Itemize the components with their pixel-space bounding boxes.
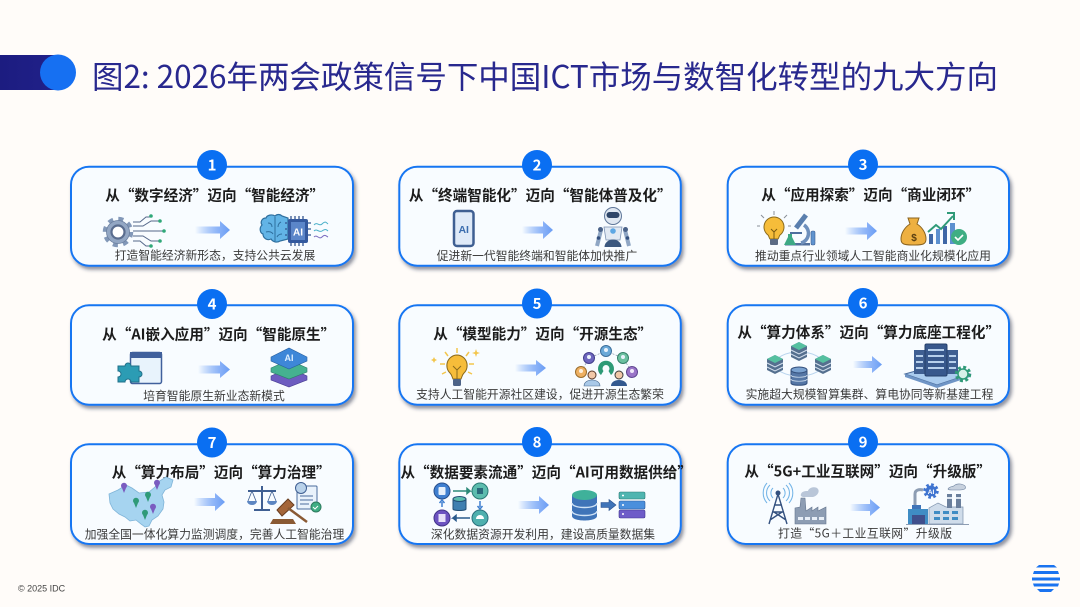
badge 2 bbox=[522, 150, 552, 180]
panel 9 bbox=[728, 427, 1009, 544]
panel 1 bbox=[71, 150, 353, 266]
heading 9: 从“5G+工业互联网”迈向“升级版” bbox=[744, 460, 991, 481]
badge 2: 2 bbox=[533, 154, 542, 176]
panel 7 bbox=[71, 428, 353, 544]
description 9: 打造“5G＋工业互联网”升级版 bbox=[778, 524, 952, 542]
copyright: © 2025 IDC bbox=[18, 584, 66, 594]
arrow bbox=[853, 356, 882, 373]
description 7: 加强全国一体化算力监测调度，完善人工智能治理 bbox=[85, 526, 344, 542]
icon: brain with AI chip bbox=[260, 214, 328, 246]
badge 9: 9 bbox=[859, 432, 868, 452]
header accent bar bbox=[0, 54, 76, 90]
badge 7: 7 bbox=[208, 432, 217, 453]
badge 8 bbox=[522, 427, 552, 457]
heading 7: 从“算力布局”迈向“算力治理” bbox=[112, 461, 331, 482]
description 5: 支持人工智能开源社区建设，促进开源生态繁荣 bbox=[416, 386, 664, 402]
badge 6: 6 bbox=[859, 292, 868, 314]
icon: money and growth chart: $ bbox=[911, 233, 917, 244]
icon: database to records bbox=[572, 490, 645, 520]
title: 图2: 2026年两会政策信号下中国ICT市场与数智化转型的九大方向 bbox=[92, 52, 998, 98]
icon: bright bulb bbox=[431, 348, 480, 386]
heading 1: 从“数字经济”迈向“智能经济” bbox=[105, 184, 324, 205]
panel 4 bbox=[71, 289, 353, 405]
badge 7 bbox=[197, 428, 227, 458]
icon: brain with AI chip: AI bbox=[293, 228, 303, 238]
icon: bulb and microscope bbox=[757, 211, 815, 246]
heading 3: 从“应用探索”迈向“商业闭环” bbox=[761, 184, 980, 205]
icon: smart factory: AI bbox=[928, 489, 934, 496]
icon: distributed servers bbox=[767, 342, 831, 385]
icon: scales, gavel and document bbox=[247, 482, 321, 524]
icon: money and growth chart bbox=[901, 213, 967, 245]
badge 5 bbox=[522, 288, 552, 318]
icon: signal tower and factory bbox=[763, 483, 826, 524]
badge 9 bbox=[848, 427, 878, 457]
arrow bbox=[850, 499, 880, 516]
arrow bbox=[198, 361, 230, 378]
icon: server platform bbox=[905, 344, 970, 388]
icon: smart factory bbox=[906, 484, 969, 525]
icon: AI phone: AI bbox=[458, 224, 469, 236]
arrow bbox=[522, 221, 553, 239]
description 3: 推动重点行业领域人工智能商业化规模化应用 bbox=[755, 247, 991, 264]
heading 6: 从“算力体系”迈向“算力底座工程化” bbox=[737, 321, 1000, 342]
badge 1 bbox=[197, 150, 227, 180]
arrow bbox=[195, 221, 230, 239]
icon: AI layer stack bbox=[271, 348, 307, 387]
heading 5: 从“模型能力”迈向“开源生态” bbox=[433, 323, 652, 344]
badge 1: 1 bbox=[208, 154, 216, 176]
panel 2 bbox=[399, 150, 681, 266]
logo bbox=[1032, 565, 1060, 592]
icon: AI phone bbox=[454, 211, 474, 246]
icon: puzzle and window bbox=[118, 352, 162, 384]
description 1: 打造智能经济新形态，支持公共云发展 bbox=[115, 246, 315, 264]
badge 3 bbox=[848, 150, 878, 180]
badge 8: 8 bbox=[533, 432, 542, 452]
icon: data flow cycle bbox=[434, 483, 488, 526]
panel 3 bbox=[728, 150, 1009, 266]
arrow bbox=[515, 360, 546, 376]
icon: China map with pins bbox=[109, 477, 173, 527]
badge 3: 3 bbox=[859, 154, 867, 175]
panel 8 bbox=[399, 427, 692, 544]
icon: open source community bbox=[576, 346, 638, 386]
panel 6 bbox=[728, 288, 1009, 405]
arrow bbox=[518, 496, 549, 514]
badge 4: 4 bbox=[208, 294, 217, 314]
badge 4 bbox=[197, 289, 227, 319]
badge 5: 5 bbox=[533, 293, 542, 314]
badge 6 bbox=[848, 288, 878, 318]
icon: robot bbox=[597, 208, 629, 247]
description 6: 实施超大规模智算集群、算电协同等新基建工程 bbox=[746, 386, 994, 402]
panel 5 bbox=[399, 288, 681, 405]
icon: AI layer stack: AI bbox=[284, 353, 294, 363]
heading 8: 从“数据要素流通”迈向“AI可用数据供给” bbox=[400, 461, 692, 482]
description 2: 促进新一代智能终端和智能体加快推广 bbox=[437, 247, 637, 264]
description 4: 培育智能原生新业态新模式 bbox=[143, 387, 285, 404]
arrow bbox=[194, 493, 225, 511]
arrow bbox=[845, 222, 877, 240]
description 8: 深化数据资源开发利用，建设高质量数据集 bbox=[431, 526, 655, 542]
heading 4: 从“AI嵌入应用”迈向“智能原生” bbox=[102, 323, 335, 344]
icon: gear with circuits bbox=[105, 214, 166, 248]
heading 2: 从“终端智能化”迈向“智能体普及化” bbox=[409, 184, 672, 205]
